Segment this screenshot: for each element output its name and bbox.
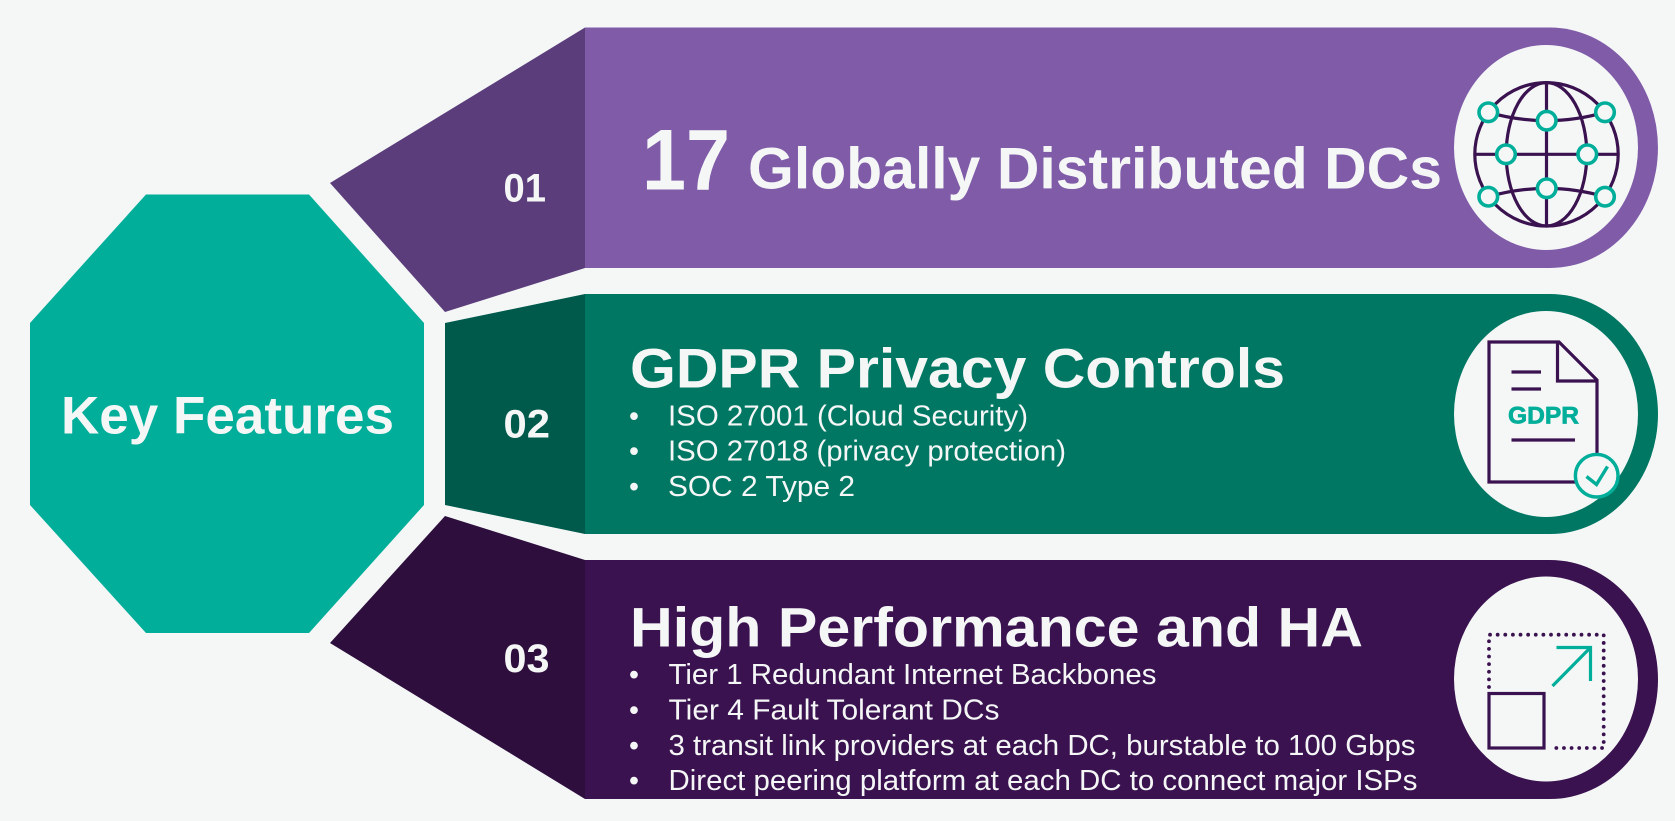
bullet list: • xyxy=(629,471,639,503)
bullet list: • xyxy=(629,436,639,468)
connector 03 xyxy=(330,516,585,799)
stat heading: 17 xyxy=(642,112,730,208)
bullet list: • xyxy=(629,659,639,691)
number 03: 03 xyxy=(504,637,550,681)
bar 02 xyxy=(585,294,1658,534)
bullet list: ISO 27018 (privacy protection) xyxy=(668,436,1066,468)
stat heading xyxy=(642,112,1442,208)
panel 03: high performance and HA xyxy=(330,516,1658,799)
bullet list: Direct peering platform at each DC to connect major ISPs xyxy=(668,765,1418,797)
octagon label: Key Features xyxy=(61,386,394,446)
connector 01 xyxy=(330,28,585,312)
bullet list: Tier 4 Fault Tolerant DCs xyxy=(668,694,1000,726)
bullet list: • xyxy=(629,765,639,797)
bullet list: • xyxy=(629,730,639,762)
connector 02 xyxy=(445,294,585,534)
icon: GDPR document with check: GDPR xyxy=(1508,402,1579,430)
bullet list: 3 transit link providers at each DC, burstable to 100 Gbps xyxy=(668,730,1416,762)
number 02: 02 xyxy=(504,403,550,447)
panel 01: globally distributed DCs xyxy=(330,28,1658,312)
bullet list xyxy=(629,400,1066,503)
bullet list: ISO 27001 (Cloud Security) xyxy=(668,400,1028,432)
bar 03 xyxy=(585,560,1658,799)
heading: GDPR Privacy Controls xyxy=(630,336,1285,399)
bullet list xyxy=(629,659,1418,797)
number 01: 01 xyxy=(504,167,546,211)
central octagon: Key Features xyxy=(30,194,424,633)
bullet list: • xyxy=(629,400,639,432)
bullet list: SOC 2 Type 2 xyxy=(668,471,855,503)
heading: High Performance and HA xyxy=(630,596,1363,659)
panel 02: GDPR privacy controls xyxy=(445,294,1658,534)
icon: scale up arrow xyxy=(1454,576,1638,782)
bar 01 xyxy=(585,28,1658,268)
stat heading: Globally Distributed DCs xyxy=(748,137,1442,202)
bullet list: • xyxy=(629,694,639,726)
icon: globe with nodes xyxy=(1454,45,1638,250)
bullet list: Tier 1 Redundant Internet Backbones xyxy=(668,659,1156,691)
icon: GDPR document with check xyxy=(1454,311,1638,517)
